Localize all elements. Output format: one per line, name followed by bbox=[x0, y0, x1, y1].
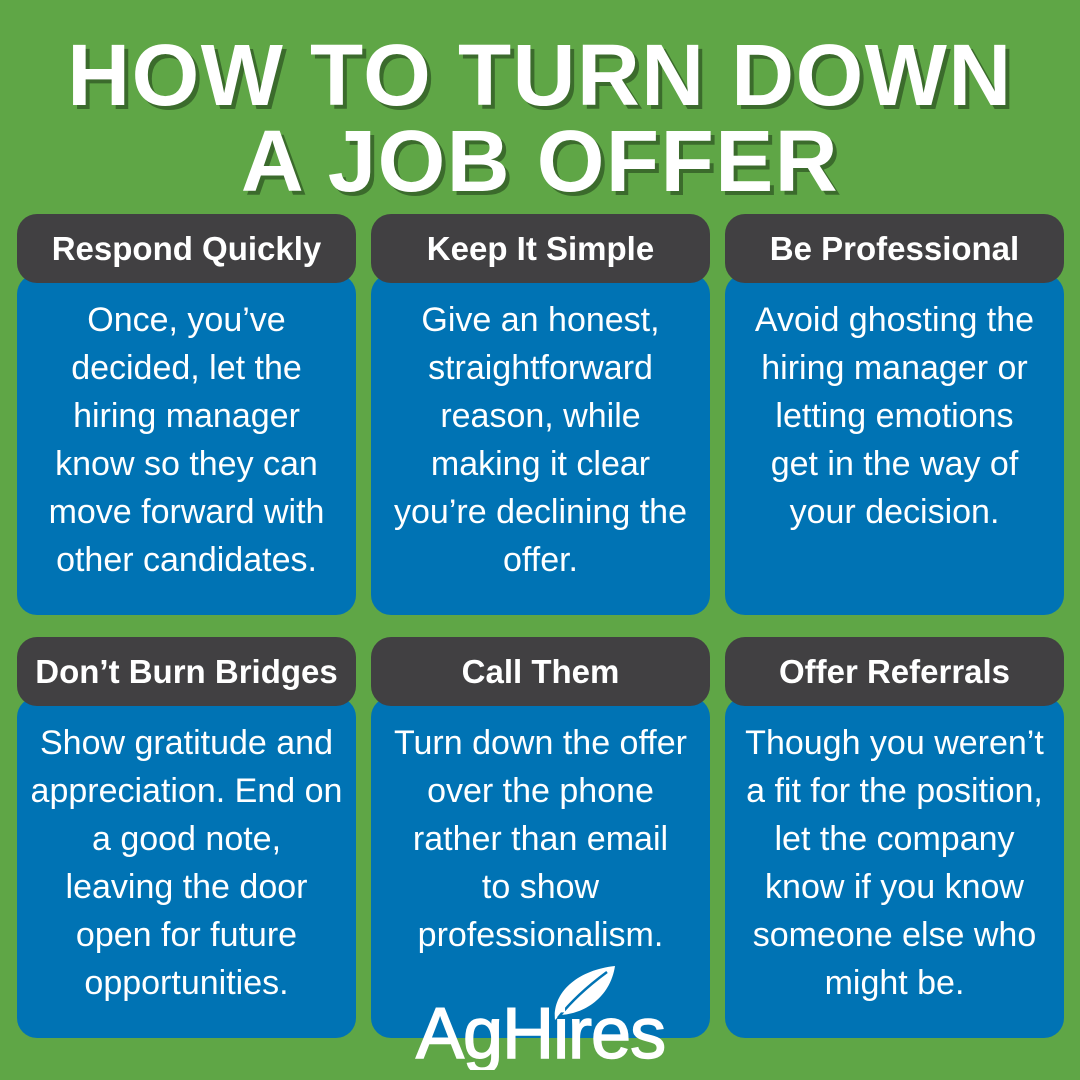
text block: over the phone bbox=[427, 772, 654, 810]
text block: know if you know bbox=[765, 868, 1024, 906]
heading bbox=[725, 214, 1064, 283]
text block: a fit for the position, bbox=[746, 772, 1043, 810]
text block bbox=[371, 274, 710, 615]
panel: be professional bbox=[725, 214, 1064, 615]
text block: you’re declining the bbox=[394, 493, 687, 531]
panel: call them bbox=[371, 637, 710, 1038]
title bbox=[67, 27, 1013, 210]
text block: someone else who bbox=[753, 916, 1036, 954]
text block: offer. bbox=[503, 541, 578, 579]
text block: Give an honest, bbox=[421, 301, 660, 339]
text block: your decision. bbox=[790, 493, 999, 531]
text block: leaving the door bbox=[66, 868, 307, 906]
panel: don't burn bridges bbox=[17, 637, 356, 1038]
heading bbox=[725, 637, 1064, 706]
text block bbox=[17, 697, 356, 1038]
text block: get in the way of bbox=[771, 445, 1018, 483]
text block: to show bbox=[482, 868, 599, 906]
text block: open for future bbox=[76, 916, 297, 954]
text block: might be. bbox=[825, 964, 964, 1002]
heading: Offer Referrals bbox=[779, 653, 1010, 690]
text block: Turn down the offer bbox=[394, 724, 687, 762]
heading: Don’t Burn Bridges bbox=[35, 653, 338, 690]
heading bbox=[17, 214, 356, 283]
title: A JOB OFFER bbox=[241, 113, 839, 210]
text block: making it clear bbox=[431, 445, 650, 483]
text block: Avoid ghosting the bbox=[755, 301, 1034, 339]
panel: respond quickly bbox=[17, 214, 356, 615]
text block bbox=[725, 697, 1064, 1038]
panel: keep it simple bbox=[371, 214, 710, 615]
heading: Keep It Simple bbox=[427, 230, 654, 267]
text block: appreciation. End on bbox=[31, 772, 342, 810]
text block: professionalism. bbox=[418, 916, 663, 954]
heading bbox=[17, 637, 356, 706]
text block: reason, while bbox=[440, 397, 641, 435]
heading: Call Them bbox=[462, 653, 619, 690]
text block: decided, let the bbox=[71, 349, 302, 387]
text block bbox=[17, 274, 356, 615]
text block: a good note, bbox=[92, 820, 281, 858]
text block: hiring manager or bbox=[761, 349, 1028, 387]
text block bbox=[725, 274, 1064, 615]
text block bbox=[371, 697, 710, 1038]
text block: know so they can bbox=[55, 445, 318, 483]
heading: Respond Quickly bbox=[52, 230, 321, 267]
logo: AgHires bbox=[415, 966, 665, 1070]
text block: hiring manager bbox=[73, 397, 300, 435]
text block: opportunities. bbox=[84, 964, 289, 1002]
text block: let the company bbox=[774, 820, 1015, 858]
heading bbox=[371, 214, 710, 283]
text block: Show gratitude and bbox=[40, 724, 333, 762]
panel: offer referrals bbox=[725, 637, 1064, 1038]
heading: Be Professional bbox=[770, 230, 1019, 267]
heading bbox=[371, 637, 710, 706]
text block: straightforward bbox=[428, 349, 653, 387]
text block: Though you weren’t bbox=[745, 724, 1044, 762]
text block: move forward with bbox=[49, 493, 324, 531]
icon: leaf bbox=[555, 966, 615, 1020]
title: HOW TO TURN DOWN bbox=[67, 27, 1013, 124]
text block: other candidates. bbox=[56, 541, 317, 579]
text block: letting emotions bbox=[775, 397, 1014, 435]
text block: Once, you’ve bbox=[87, 301, 286, 339]
text block: rather than email bbox=[413, 820, 668, 858]
